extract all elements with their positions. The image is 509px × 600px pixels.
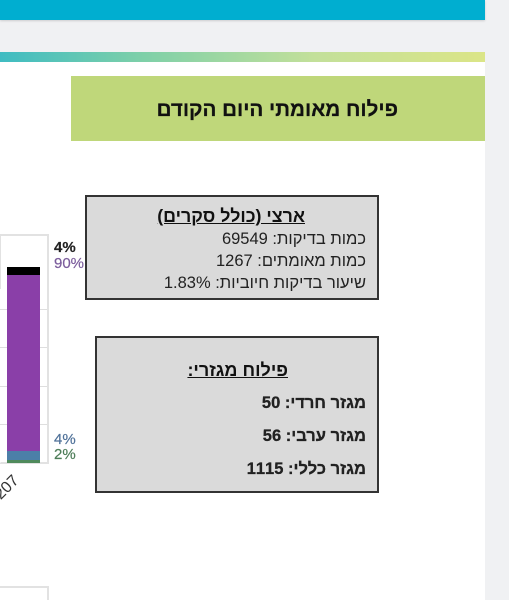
stacked bar — [7, 267, 40, 463]
segment: green 2% — [7, 460, 40, 463]
lower chart frame (cropped) — [0, 586, 49, 600]
top teal header bar — [0, 0, 485, 20]
gradient divider band — [0, 52, 485, 62]
segment: black 4% — [7, 267, 40, 275]
value label: green 2%: 2% — [54, 446, 76, 463]
panel: sector breakdown — [95, 336, 379, 493]
title text: פילוח מאומתי היום הקודם — [157, 98, 398, 121]
general sector: מגזר כללי: 1115 — [247, 460, 366, 478]
value label: black 4%: 4% — [54, 239, 76, 256]
Haredi sector: מגזר חרדי: 50 — [262, 394, 366, 412]
value label: blue 4%: 4% — [54, 430, 76, 448]
chart frame — [0, 234, 49, 464]
national heading: ארצי (כולל סקרים) — [157, 206, 305, 226]
segment: purple 90% — [7, 275, 40, 451]
Arab sector: מגזר ערבי: 56 — [263, 427, 366, 445]
segment: blue 4% — [7, 451, 40, 460]
confirmed count: כמות מאומתים: 1267 — [216, 252, 366, 270]
tests count: כמות בדיקות: 69549 — [222, 230, 366, 248]
title banner — [71, 76, 485, 141]
panel: national totals — [85, 195, 379, 300]
value label: purple 90%: 90% — [54, 254, 84, 272]
sector heading: פילוח מגזרי: — [187, 360, 288, 380]
positivity rate: שיעור בדיקות חיוביות: 1.83% — [164, 274, 366, 292]
stacked bar chart (cropped) — [0, 234, 49, 503]
frame left edge — [0, 234, 1, 289]
